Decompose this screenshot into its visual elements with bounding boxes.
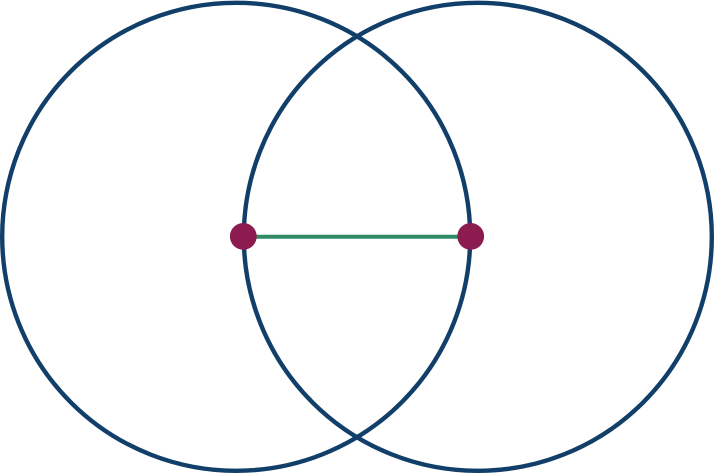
left point [230, 223, 257, 250]
green connecting line [243, 235, 471, 239]
right point [457, 223, 484, 250]
right circle [244, 3, 712, 471]
left circle [2, 3, 470, 471]
